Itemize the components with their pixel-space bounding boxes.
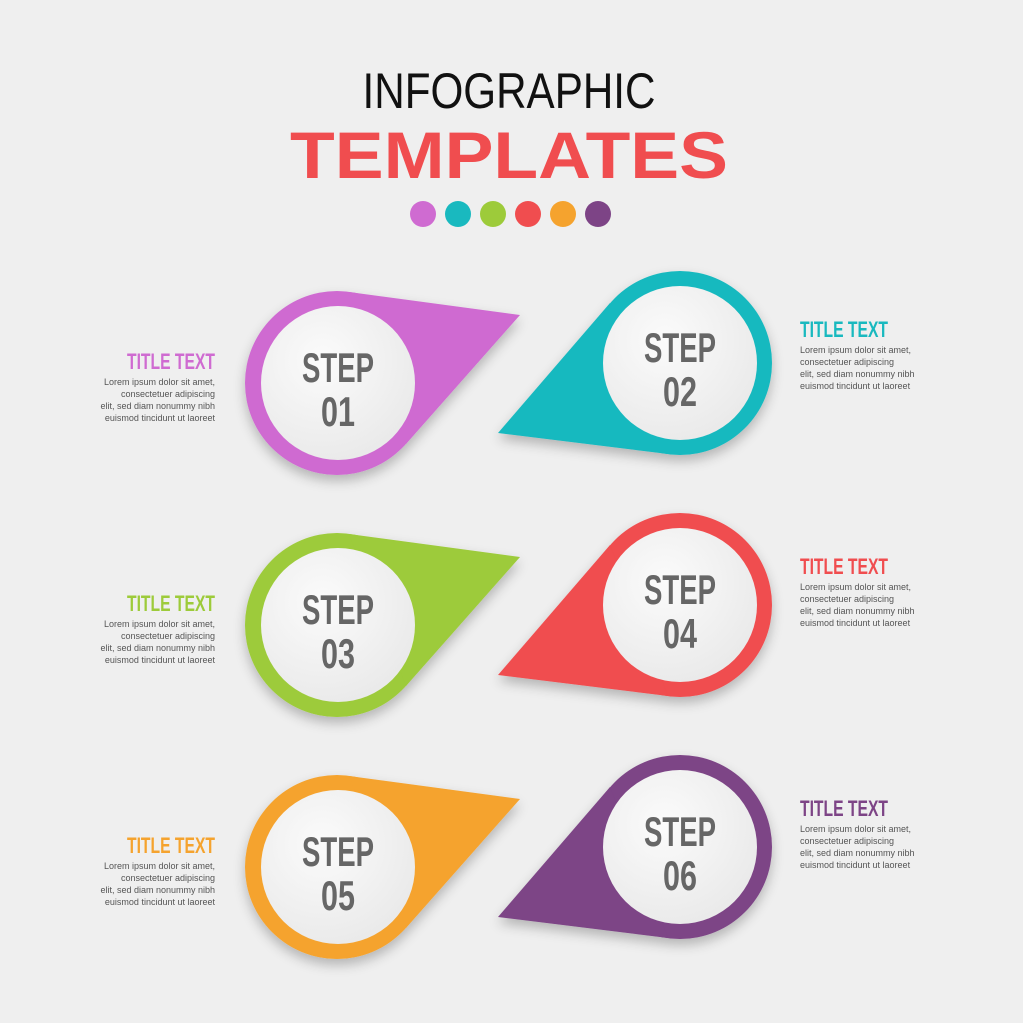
step 02: [498, 271, 772, 455]
text 02: Lorem ipsum dolor sit amet,: [800, 345, 911, 355]
title: INFOGRAPHIC: [362, 63, 656, 119]
text 03: Lorem ipsum dolor sit amet,: [104, 619, 215, 629]
text 05: consectetuer adipiscing: [121, 873, 215, 883]
step 06: 06: [663, 852, 697, 899]
text 03: euismod tincidunt ut laoreet: [105, 655, 215, 665]
text 02: elit, sed diam nonummy nibh: [800, 369, 915, 379]
step 04: 04: [663, 610, 697, 657]
text 04: TITLE TEXT: [800, 554, 888, 579]
text 04: consectetuer adipiscing: [800, 594, 894, 604]
text 04: Lorem ipsum dolor sit amet,: [800, 582, 911, 592]
text 06: euismod tincidunt ut laoreet: [800, 860, 911, 870]
text 05: TITLE TEXT: [127, 833, 215, 858]
step 03: STEP: [302, 586, 374, 633]
text 03: TITLE TEXT: [127, 591, 215, 616]
text 05: [100, 833, 215, 907]
text 04: elit, sed diam nonummy nibh: [800, 606, 915, 616]
text 05: Lorem ipsum dolor sit amet,: [104, 861, 215, 871]
text 06: [800, 796, 915, 870]
text 06: Lorem ipsum dolor sit amet,: [800, 824, 911, 834]
step 02: STEP: [644, 324, 716, 371]
text 06: TITLE TEXT: [800, 796, 888, 821]
step 04: STEP: [644, 566, 716, 613]
step 03: 03: [321, 630, 355, 677]
title: [290, 63, 728, 192]
text 01: [100, 349, 215, 423]
text 03: consectetuer adipiscing: [121, 631, 215, 641]
text 02: TITLE TEXT: [800, 317, 888, 342]
text 01: Lorem ipsum dolor sit amet,: [104, 377, 215, 387]
step 01: 01: [321, 388, 355, 435]
step 02: 02: [663, 368, 697, 415]
text 03: elit, sed diam nonummy nibh: [100, 643, 215, 653]
text 01: elit, sed diam nonummy nibh: [100, 401, 215, 411]
step 05: 05: [321, 872, 355, 919]
text 05: elit, sed diam nonummy nibh: [100, 885, 215, 895]
step 06: [498, 755, 772, 939]
title: TEMPLATES: [290, 118, 728, 192]
text 06: elit, sed diam nonummy nibh: [800, 848, 915, 858]
text 04: [800, 554, 915, 628]
text 06: consectetuer adipiscing: [800, 836, 894, 846]
text 03: [100, 591, 215, 665]
step 05: STEP: [302, 828, 374, 875]
step 04: [498, 513, 772, 697]
text 04: euismod tincidunt ut laoreet: [800, 618, 911, 628]
text 02: consectetuer adipiscing: [800, 357, 894, 367]
text 01: euismod tincidunt ut laoreet: [105, 413, 215, 423]
text 05: euismod tincidunt ut laoreet: [105, 897, 215, 907]
step 06: STEP: [644, 808, 716, 855]
text 02: euismod tincidunt ut laoreet: [800, 381, 911, 391]
text 01: consectetuer adipiscing: [121, 389, 215, 399]
step 03: [245, 533, 520, 717]
text 02: [800, 317, 915, 391]
step 01: [245, 291, 520, 475]
color dots: [410, 201, 611, 227]
step 05: [245, 775, 520, 959]
step 01: STEP: [302, 344, 374, 391]
text 01: TITLE TEXT: [127, 349, 215, 374]
